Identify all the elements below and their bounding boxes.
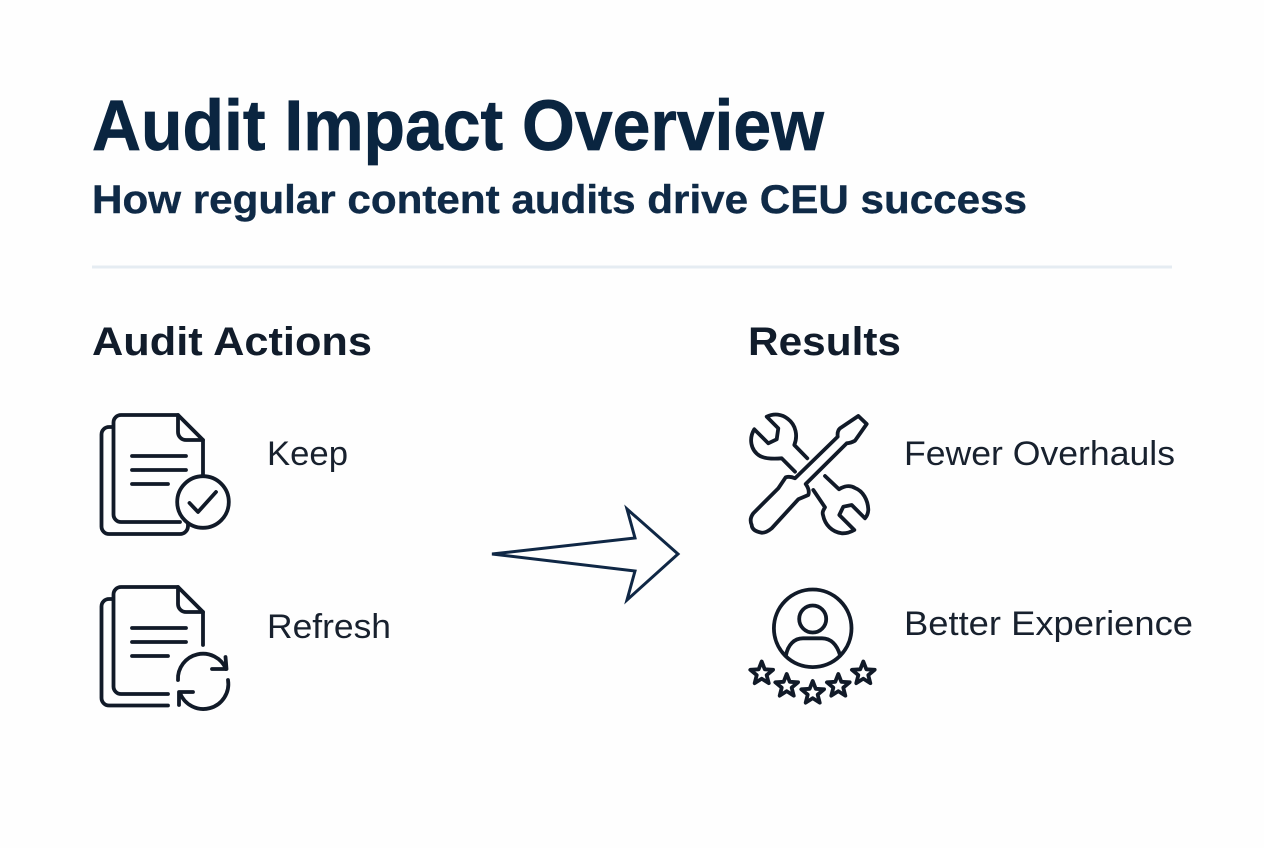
panel: results bbox=[748, 320, 1193, 703]
icon: document with check bbox=[102, 415, 229, 534]
label: fewer overhauls: Fewer Overhauls bbox=[904, 435, 1175, 473]
arrow bbox=[492, 509, 678, 600]
label: better experience: Better Experience bbox=[904, 605, 1193, 643]
icon: document with refresh bbox=[102, 587, 228, 709]
icon: user with stars bbox=[750, 590, 875, 703]
label: refresh: Refresh bbox=[267, 608, 391, 646]
panel: audit actions bbox=[92, 320, 391, 709]
heading: results: Results bbox=[748, 320, 901, 364]
subtitle: How regular content audits drive CEU success bbox=[92, 178, 1027, 222]
icon: crossed tools bbox=[751, 414, 868, 533]
title: Audit Impact Overview bbox=[92, 87, 825, 166]
heading: audit actions: Audit Actions bbox=[92, 320, 372, 364]
label: keep: Keep bbox=[267, 435, 348, 473]
